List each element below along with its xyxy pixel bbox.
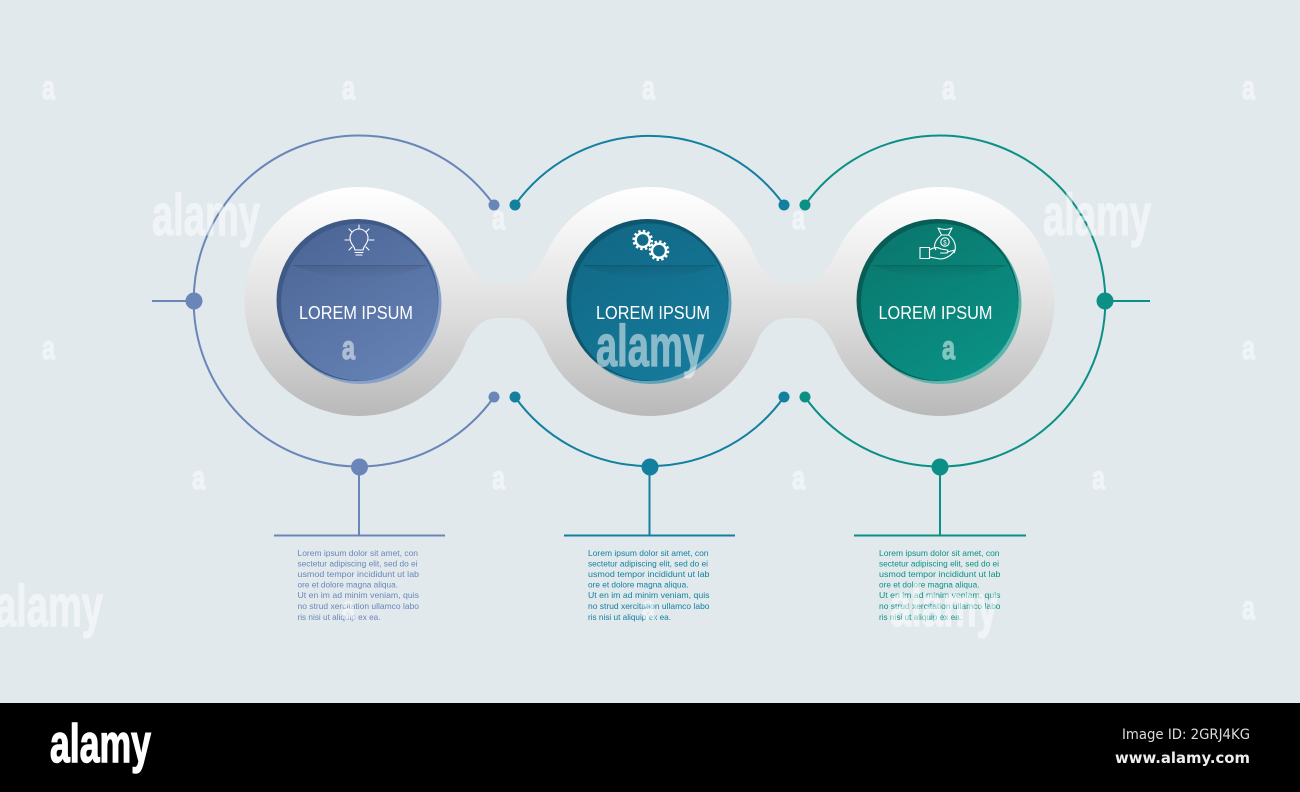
blue description: Lorem ipsum dolor sit amet, con — [298, 548, 418, 558]
icon: gears — [634, 231, 668, 260]
icon: money bag and hand: $ — [943, 240, 947, 246]
watermarks: alamy — [890, 574, 998, 639]
watermarks: alamy — [152, 183, 260, 248]
green arc and connectors — [805, 136, 1150, 536]
watermarks: a — [792, 199, 805, 236]
watermarks: a — [942, 329, 955, 366]
teal description: Lorem ipsum dolor sit amet, con — [588, 548, 709, 558]
footer logo: alamy — [50, 714, 151, 774]
watermarks: a — [342, 69, 355, 106]
teal description — [588, 548, 710, 622]
teal description: usmod tempor incididunt ut lab — [588, 569, 710, 579]
blue description — [298, 548, 419, 622]
blue description: sectetur adipiscing elit, sed do ei — [298, 558, 418, 568]
watermarks: a — [42, 329, 55, 366]
teal description: no strud xercitation ullamco labo — [588, 601, 710, 611]
watermarks: a — [942, 69, 955, 106]
green description: no strud xercitation ullamco labo — [879, 601, 1001, 611]
watermarks: a — [642, 589, 655, 626]
teal description: Ut en im ad minim veniam, quis — [588, 590, 710, 600]
watermarks: a — [1242, 69, 1255, 106]
blue nodes — [186, 200, 500, 476]
teal heading: LOREM IPSUM — [596, 302, 710, 323]
teal description: ore et dolore magna aliqua. — [588, 580, 688, 590]
panel: blue step — [152, 136, 500, 622]
watermarks: a — [342, 589, 355, 626]
watermarks: a — [1242, 329, 1255, 366]
website: www.alamy.com — [1115, 749, 1250, 767]
green description: Ut en im ad minim veniam, quis — [879, 590, 1000, 600]
panel: green step — [800, 136, 1150, 622]
green description: usmod tempor incididunt ut lab — [879, 569, 1001, 579]
blue description: usmod tempor incididunt ut lab — [298, 569, 419, 579]
image id: Image ID: 2GRJ4KG — [1122, 727, 1250, 743]
watermarks: a — [342, 329, 355, 366]
green description: sectetur adipiscing elit, sed do ei — [879, 558, 999, 568]
watermarks: a — [192, 459, 205, 496]
blue heading: LOREM IPSUM — [299, 302, 413, 323]
watermarks: alamy — [596, 314, 704, 379]
teal description: sectetur adipiscing elit, sed do ei — [588, 558, 708, 568]
watermarks: a — [792, 459, 805, 496]
teal arc and connectors — [515, 136, 784, 536]
icon: money bag and hand — [920, 228, 955, 259]
green disc — [856, 219, 1022, 384]
green description: Lorem ipsum dolor sit amet, con — [879, 548, 1000, 558]
watermarks: a — [492, 199, 505, 236]
green description: ore et dolore magna aliqua. — [879, 580, 980, 590]
green heading: LOREM IPSUM — [878, 302, 992, 323]
blue arc and connectors — [152, 136, 494, 536]
watermarks: a — [42, 69, 55, 106]
watermarks — [0, 69, 1255, 639]
blue description: no strud xercitation ullamco labo — [298, 601, 419, 611]
watermarks: a — [492, 459, 505, 496]
blue description: Ut en im ad minim veniam, quis — [298, 590, 419, 600]
watermarks: a — [642, 69, 655, 106]
blue description: ris nisi ut aliquip ex ea. — [298, 612, 380, 622]
watermarks: a — [1092, 459, 1105, 496]
teal nodes — [510, 200, 790, 476]
panel: teal step — [510, 136, 790, 622]
watermarks: alamy — [1043, 183, 1151, 248]
watermarks: a — [1242, 589, 1255, 626]
blue description: ore et dolore magna aliqua. — [298, 580, 398, 590]
green nodes — [800, 200, 1114, 476]
teal disc — [566, 219, 732, 384]
icon: light bulb — [345, 225, 374, 255]
teal description: ris nisi ut aliquip ex ea. — [588, 612, 671, 622]
green description — [879, 548, 1001, 622]
blue disc — [276, 219, 442, 384]
footer bar — [0, 703, 1300, 792]
connected circle body — [244, 187, 1054, 416]
green description: ris nisi ut aliquip ex ea. — [879, 612, 962, 622]
